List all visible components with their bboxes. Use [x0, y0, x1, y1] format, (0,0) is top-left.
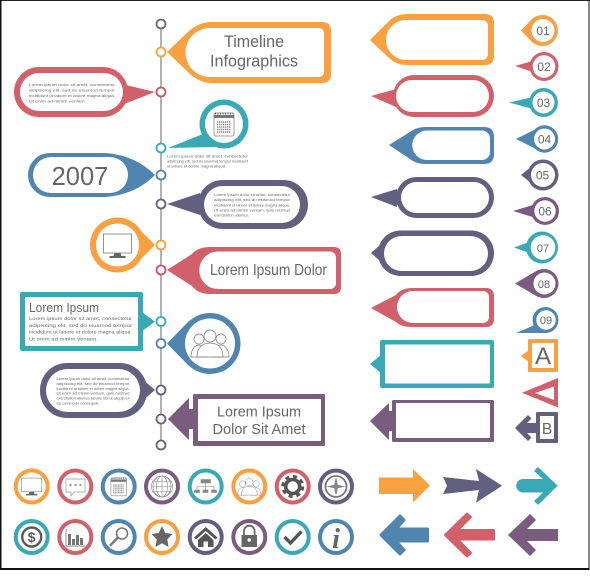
- icon: magnifier: [110, 528, 128, 546]
- callout: title: Infographics: [210, 52, 298, 70]
- number pin 08: [515, 269, 558, 298]
- icon: globe: [152, 476, 172, 497]
- letter box B: B: [542, 421, 552, 438]
- number pin 01: 01: [536, 24, 550, 38]
- icon: calendar: [214, 113, 234, 136]
- text block: under teal pin: [167, 154, 249, 168]
- icon: check: [284, 532, 302, 543]
- callout: 2007: [28, 153, 155, 197]
- number pin 05: [521, 160, 558, 190]
- callout: red text bubble: adipiscing elit, sed do eiusmod tempor: [29, 88, 116, 92]
- callout: teal text box: Lorem Ipsum: [29, 301, 99, 315]
- callout: slate small text bubble: ea commodo consequat.: [56, 402, 100, 406]
- arrow: slate: [443, 469, 502, 503]
- pin: orange monitor: [90, 218, 155, 272]
- callout: slate small text bubble: Lorem ipsum dolor sit amet, consectetur: [56, 377, 131, 381]
- number pin 02: [515, 52, 558, 81]
- icon: monitor: [104, 234, 132, 258]
- callout: slate text bubble: incididunt ut labore et dolore magna aliqua.: [214, 202, 290, 207]
- callout: teal text box: adipiscing elit, sed do eiusmod tempor: [29, 323, 133, 328]
- number pin 09: 09: [540, 315, 552, 327]
- number pin 04: 04: [538, 132, 551, 146]
- callout: teal text box: incididunt ut labore et dolore magna aliqua.: [29, 330, 132, 334]
- callout: red text bubble: Ut enim ad minim veniam.: [29, 98, 86, 104]
- frame: slate: [371, 177, 494, 218]
- callout: slate small text bubble: [40, 363, 155, 418]
- icon: info: i: [332, 524, 340, 555]
- pin: blue people: [167, 313, 240, 374]
- frame: blue: [389, 127, 494, 164]
- callout: slate text bubble: Ut enim ad minim veniam, quis nostrud: [214, 207, 290, 212]
- number pin 05: 05: [536, 168, 549, 182]
- icon: people small: [238, 478, 261, 495]
- callout: slate text bubble: Lorem ipsum dolor sit amet, consectetur: [214, 192, 291, 197]
- text block: under teal pin: ut labore et dolore magna aliqua.: [167, 164, 226, 168]
- callout: plum arrow box: Lorem Ipsum: [217, 404, 301, 420]
- callout: slate small text bubble: adipiscing elit, sed do eiusmod tempor: [56, 382, 131, 386]
- arrow: red: [445, 514, 494, 556]
- icon: gear: [283, 476, 303, 496]
- letter box A: A: [535, 343, 551, 370]
- icon row 1: [16, 470, 352, 502]
- callout: Lorem Ipsum Dolor: Lorem Ipsum Dolor: [210, 262, 328, 279]
- callout: plum arrow box: [168, 394, 325, 446]
- timeline axis: [156, 20, 166, 450]
- callout: teal text box: [20, 292, 155, 351]
- triangle outline: [522, 378, 558, 408]
- arrow: orange: [379, 469, 430, 502]
- number pin 01: [521, 15, 558, 46]
- icon: dollar: $: [28, 529, 36, 545]
- letter box A: [521, 339, 558, 372]
- callout: title: [167, 22, 331, 83]
- icon: sitemap: [194, 480, 216, 492]
- number pin 03: [509, 88, 558, 117]
- arrow: teal: [516, 467, 558, 505]
- callout: 2007: 2007: [52, 163, 108, 191]
- frame: plum arrow: [370, 400, 494, 442]
- text block: under teal pin: adipiscing elit, sed do eiusmod tempor incididunt: [167, 158, 249, 164]
- number pin 07: [514, 232, 558, 264]
- callout: slate small text bubble: incididunt ut labore et dolore magna aliqua.: [56, 387, 130, 391]
- number pin 09: [516, 307, 558, 333]
- frame: red pointed: [371, 288, 494, 327]
- frame: slate wide: [371, 230, 494, 276]
- number pin 06: 06: [538, 204, 552, 218]
- callout: title: Timeline: [224, 33, 284, 51]
- frame: red: [371, 75, 494, 117]
- callout: slate small text bubble: exercitation ullamco laboris nisi ut aliquip ex: [56, 396, 130, 400]
- icon row 2: [16, 521, 352, 555]
- callout: slate text bubble: [167, 180, 308, 229]
- callout: red text bubble: incididunt ut labore et dolore magna aliqua.: [29, 93, 115, 98]
- arrow: blue: [381, 516, 428, 554]
- callout: teal text box: Ut enim ad minim veniam.: [29, 336, 98, 342]
- callout: red text bubble: [14, 67, 155, 117]
- callout: slate text bubble: exercitation ullamco.: [214, 212, 249, 218]
- callout: slate text bubble: adipiscing elit, sed do eiusmod tempor: [214, 197, 291, 202]
- icon: speech bubble: [66, 479, 85, 496]
- pin: teal calendar: [168, 100, 248, 148]
- frame: teal: [370, 340, 494, 388]
- number pin 08: 08: [538, 279, 550, 291]
- text block: under teal pin: Lorem ipsum dolor sit amet, consectetur: [167, 154, 249, 158]
- letter box B: [515, 412, 558, 443]
- arrow: plum: [508, 514, 558, 556]
- number pin 07: 07: [537, 243, 549, 255]
- frame: orange: [370, 14, 494, 65]
- callout: Lorem Ipsum Dolor: [167, 247, 341, 294]
- callout: red text bubble: Lorem ipsum dolor sit amet, consectetur: [29, 82, 116, 87]
- icon: compass: [326, 476, 346, 497]
- callout: teal text box: Lorem ipsum dolor sit amet, consectetur: [29, 316, 133, 321]
- icon: lock: [242, 526, 257, 547]
- number pin 04: [516, 125, 558, 153]
- icon: dollar: [22, 528, 41, 546]
- icon: monitor small: [22, 478, 42, 495]
- icon: home: [194, 527, 218, 547]
- icon: bar chart: [66, 529, 85, 546]
- icon: star: [152, 526, 172, 547]
- icon: people: [191, 330, 229, 357]
- callout: plum arrow box: Dolor Sit Amet: [212, 421, 306, 438]
- number pin 02: 02: [537, 60, 551, 74]
- number pin 03: 03: [537, 96, 550, 110]
- number pin 06: [513, 197, 559, 225]
- callout: slate small text bubble: Ut enim ad minim veniam, quis nostrud: [56, 392, 130, 396]
- icon: calendar small: [111, 478, 126, 496]
